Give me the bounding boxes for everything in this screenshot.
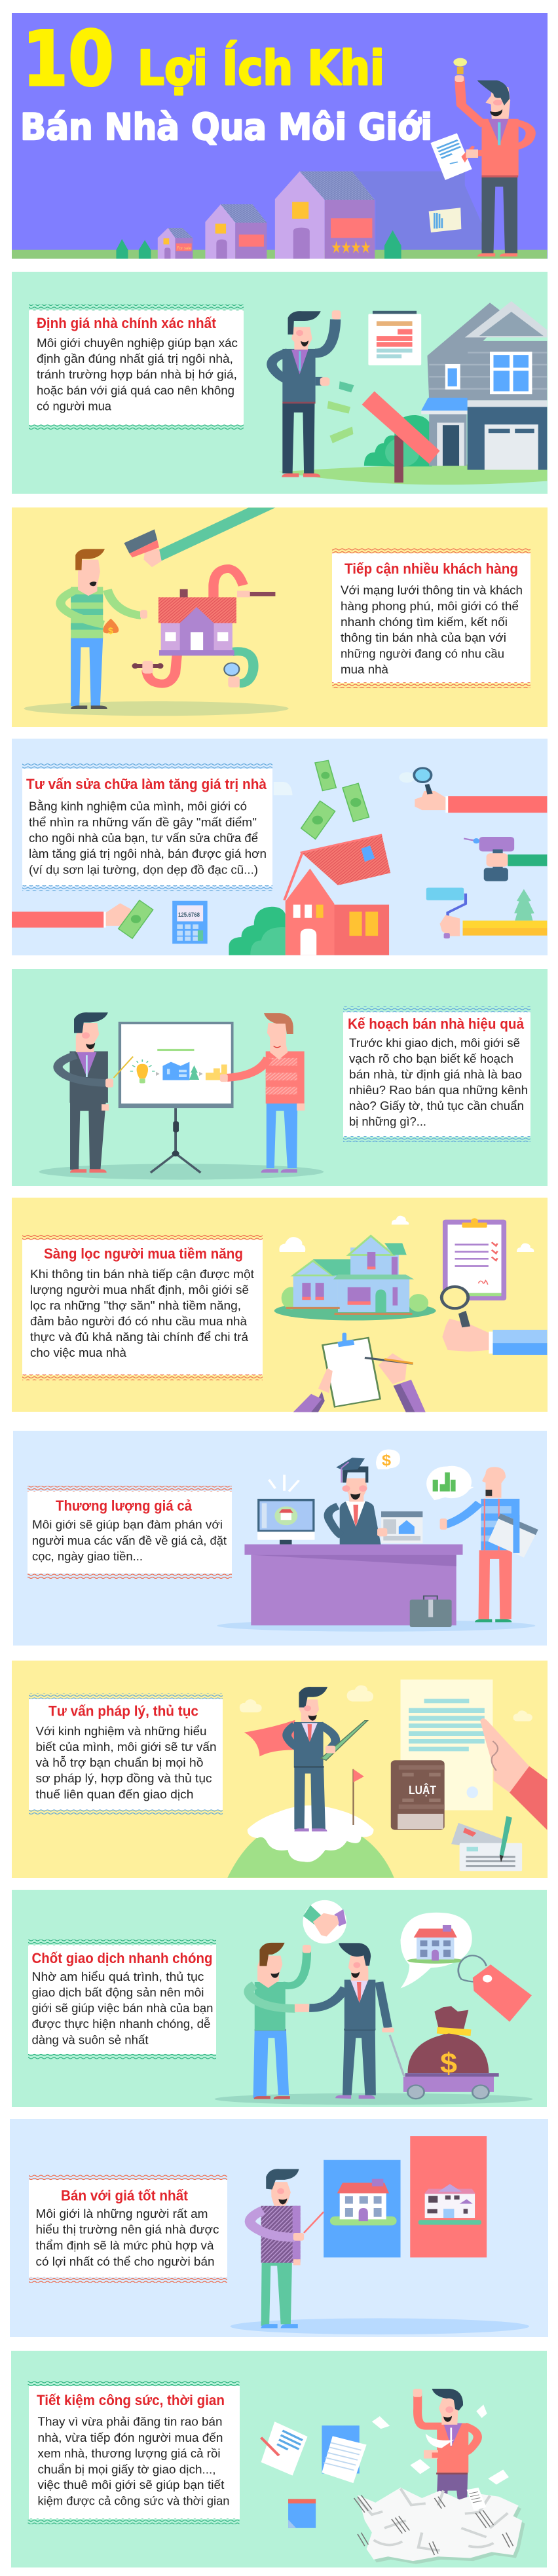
body text: đảm bảo người đó có nhu cầu mua nhà bbox=[30, 1315, 248, 1328]
body text: Khi thông tin bán nhà tiếp cận được một bbox=[30, 1268, 254, 1281]
body text bbox=[38, 2415, 229, 2508]
body text bbox=[341, 584, 523, 676]
title line 2: Bán Nhà Qua Môi Giới bbox=[20, 106, 432, 148]
heading: Định giá nhà chính xác nhất bbox=[37, 315, 217, 331]
panel: 8 chot giao dich bbox=[12, 1890, 547, 2107]
panel: 9 ban voi gia tot nhat bbox=[10, 2119, 548, 2337]
heading: Bán với giá tốt nhất bbox=[61, 2187, 189, 2204]
money bag dollar sign: $ bbox=[108, 625, 113, 636]
body text: bán nhà, từ định giá nhà là bao bbox=[349, 1068, 522, 1081]
illustration: man in paper pile with flying documents bbox=[261, 2389, 525, 2564]
body text: Môi giới sẽ giúp bạn đàm phán với bbox=[32, 1518, 223, 1531]
body text bbox=[31, 1970, 214, 2047]
body text: có người mua bbox=[37, 399, 112, 413]
body text: có lợi nhất có thể cho người bán bbox=[35, 2255, 215, 2268]
body text: Với kinh nghiệm và những hiểu bbox=[35, 1725, 207, 1738]
body text: lượng người mua nhất định, môi giới sẽ bbox=[30, 1283, 249, 1297]
body text: việc thuê môi giới sẽ giúp bạn tiết bbox=[38, 2478, 224, 2492]
body text bbox=[37, 337, 238, 413]
body text: người mua các vấn đề về giá cả, đặt bbox=[32, 1534, 227, 1547]
body text: biết của mình, môi giới sẽ tư vấn bbox=[35, 1740, 216, 1754]
panel: 2 tiep can khach hang bbox=[12, 507, 548, 727]
illustration: hands, money, calculator and house bbox=[12, 760, 547, 955]
illustration: two men and presentation board bbox=[39, 1012, 324, 1180]
body text: dàng và suôn sẻ nhất bbox=[31, 2034, 148, 2047]
body text: Thay vì vừa phải đăng tin rao bán bbox=[38, 2415, 223, 2428]
body text: (ví dụ sơn lại tường, dọn dẹp đồ đạc cũ...) bbox=[29, 863, 258, 876]
body text bbox=[29, 799, 267, 876]
illustration: agent, money, sign and house bbox=[272, 301, 547, 485]
body text: làm tăng giá trị ngôi nhà, bán được giá hơn bbox=[29, 847, 267, 860]
body text bbox=[35, 2207, 219, 2268]
body text: thể nhìn ra những vấn đề gây "mất điểm" bbox=[29, 816, 257, 829]
panel: 10 tiet kiem cong suc bbox=[11, 2351, 547, 2567]
body text: mua nhà bbox=[341, 663, 389, 676]
body text: vạch rõ cho bạn biết kế hoạch bbox=[349, 1052, 513, 1065]
body text: kiệm được cả công sức và thời gian bbox=[38, 2495, 229, 2508]
body text: xem nhà, thương lượng giá cả rồi bbox=[38, 2447, 220, 2460]
body text: những người đang có nhu cầu bbox=[341, 647, 504, 660]
heading: Tư vấn pháp lý, thủ tục bbox=[48, 1702, 198, 1720]
body text bbox=[35, 1725, 216, 1801]
illustration: house, clipboards, magnifier bbox=[274, 1216, 547, 1412]
body text bbox=[32, 1518, 227, 1563]
text box bbox=[343, 1006, 530, 1142]
body text bbox=[30, 1268, 254, 1359]
illustration: man pointing at two house cards bbox=[231, 2136, 529, 2334]
body text: thuế liên quan đến giao dịch bbox=[35, 1788, 194, 1801]
text box bbox=[28, 1486, 232, 1579]
panel: 3 tu van sua chua bbox=[12, 739, 548, 955]
body text: Với mạng lưới thông tin và khách bbox=[341, 584, 523, 597]
body text: và hỗ trợ bạn chuẩn bị mọi hồ bbox=[35, 1756, 203, 1769]
text box bbox=[29, 304, 244, 430]
body text: nhanh chóng tìm kiếm, kết nối bbox=[341, 616, 508, 629]
illustration: handshake, bubbles, tag and money cart bbox=[215, 1900, 533, 2105]
body text: Môi giới là những người rất am bbox=[35, 2207, 208, 2220]
text box bbox=[28, 1940, 216, 2059]
body text: cho ngôi nhà của bạn, tư vấn sửa chữa để bbox=[29, 832, 258, 845]
body text: Nhờ am hiểu quá trình, thủ tục bbox=[31, 1970, 204, 1983]
text box bbox=[332, 548, 530, 688]
text box bbox=[29, 2174, 227, 2283]
body text: nào? Giấy tờ, thủ tục cần chuẩn bbox=[349, 1099, 524, 1113]
body text: tránh trường hợp bán nhà bị hớ giá, bbox=[37, 368, 237, 381]
text box bbox=[28, 2381, 240, 2524]
dollar sign on money bag: $ bbox=[440, 2048, 457, 2080]
body text: Bằng kinh nghiệm của mình, môi giới có bbox=[29, 799, 247, 813]
title line 1: Lợi Ích Khi bbox=[138, 41, 384, 96]
body text: hiểu thị trường nên giá nhà được bbox=[35, 2223, 219, 2236]
body text: giao dịch bất động sản nên môi bbox=[31, 1986, 204, 1999]
heading: Tư vấn sửa chữa làm tăng giá trị nhà bbox=[26, 776, 267, 792]
body text: chuẩn bị mọi giấy tờ giao dịch..., bbox=[38, 2463, 216, 2476]
header illustration: houses, trees and agent bbox=[12, 58, 547, 259]
body text: thông tin bán nhà của bạn với bbox=[341, 631, 506, 644]
body text: lọc ra những "thợ săn" nhà tiềm năng, bbox=[30, 1299, 241, 1312]
text box bbox=[22, 1234, 263, 1380]
body text: thực và đủ khả năng tài chính để chi trả bbox=[30, 1331, 249, 1344]
calculator display: 125.6768 bbox=[178, 911, 200, 919]
body text bbox=[349, 1037, 528, 1128]
panel: 1 dinh gia bbox=[12, 272, 548, 494]
illustration: desk, monitor, agent and client bbox=[217, 1450, 538, 1632]
heading: Kế hoạch bán nhà hiệu quả bbox=[348, 1016, 525, 1032]
text box bbox=[29, 1693, 223, 1815]
heading: Tiết kiệm công sức, thời gian bbox=[37, 2392, 225, 2408]
body text: sơ pháp lý, hợp đồng và thủ tục bbox=[35, 1772, 212, 1785]
body text: Môi giới chuyên nghiệp giúp bạn xác bbox=[37, 337, 238, 350]
heading: Sàng lọc người mua tiềm năng bbox=[44, 1245, 243, 1262]
body text: cọc, ngày giao tiền... bbox=[32, 1550, 143, 1563]
panel: 5 sang loc nguoi mua bbox=[12, 1198, 548, 1412]
panel: 7 tu van phap ly bbox=[12, 1661, 548, 1878]
body text: bị những gì?... bbox=[349, 1115, 426, 1128]
number 10: 10 bbox=[22, 15, 114, 103]
panel: 6 thuong luong gia ca bbox=[13, 1431, 547, 1646]
illustration: man on hill, law book and document bbox=[227, 1680, 547, 1878]
heading: Tiếp cận nhiều khách hàng bbox=[344, 561, 518, 577]
heading: Chốt giao dịch nhanh chóng bbox=[31, 1950, 212, 1966]
stars on large house: ★★★★ bbox=[331, 240, 371, 255]
text box bbox=[22, 763, 272, 891]
illustration: man, house and hands bbox=[24, 507, 289, 716]
dollar sign in speech bubble: $ bbox=[382, 1452, 392, 1469]
body text: Trước khi giao dịch, môi giới sẽ bbox=[349, 1037, 520, 1050]
body text: định gần đúng nhất giá trị ngôi nhà, bbox=[37, 352, 233, 365]
body text: giới sẽ giúp việc bán nhà của bạn bbox=[31, 2002, 214, 2015]
book label: LUẬT bbox=[409, 1783, 436, 1797]
body text: hàng phong phú, môi giới có thể bbox=[341, 600, 519, 613]
body text: được thực hiện nhanh chóng, dễ bbox=[31, 2017, 211, 2031]
body text: nhà, vừa tiếp đón người mua đến bbox=[38, 2431, 223, 2444]
body text: hoặc bán với giá quá cao nên không bbox=[37, 384, 234, 397]
panel: 4 ke hoach ban nha bbox=[12, 969, 548, 1186]
body text: nhiêu? Rao bán qua những kênh bbox=[349, 1084, 528, 1097]
body text: cho việc mua nhà bbox=[30, 1346, 127, 1359]
body text: thẩm định sẽ là mức phù hợp và bbox=[35, 2239, 215, 2253]
heading: Thương lượng giá cả bbox=[56, 1498, 193, 1514]
for sale sign text: For sale bbox=[177, 246, 191, 251]
panel: header banner bbox=[12, 13, 548, 259]
